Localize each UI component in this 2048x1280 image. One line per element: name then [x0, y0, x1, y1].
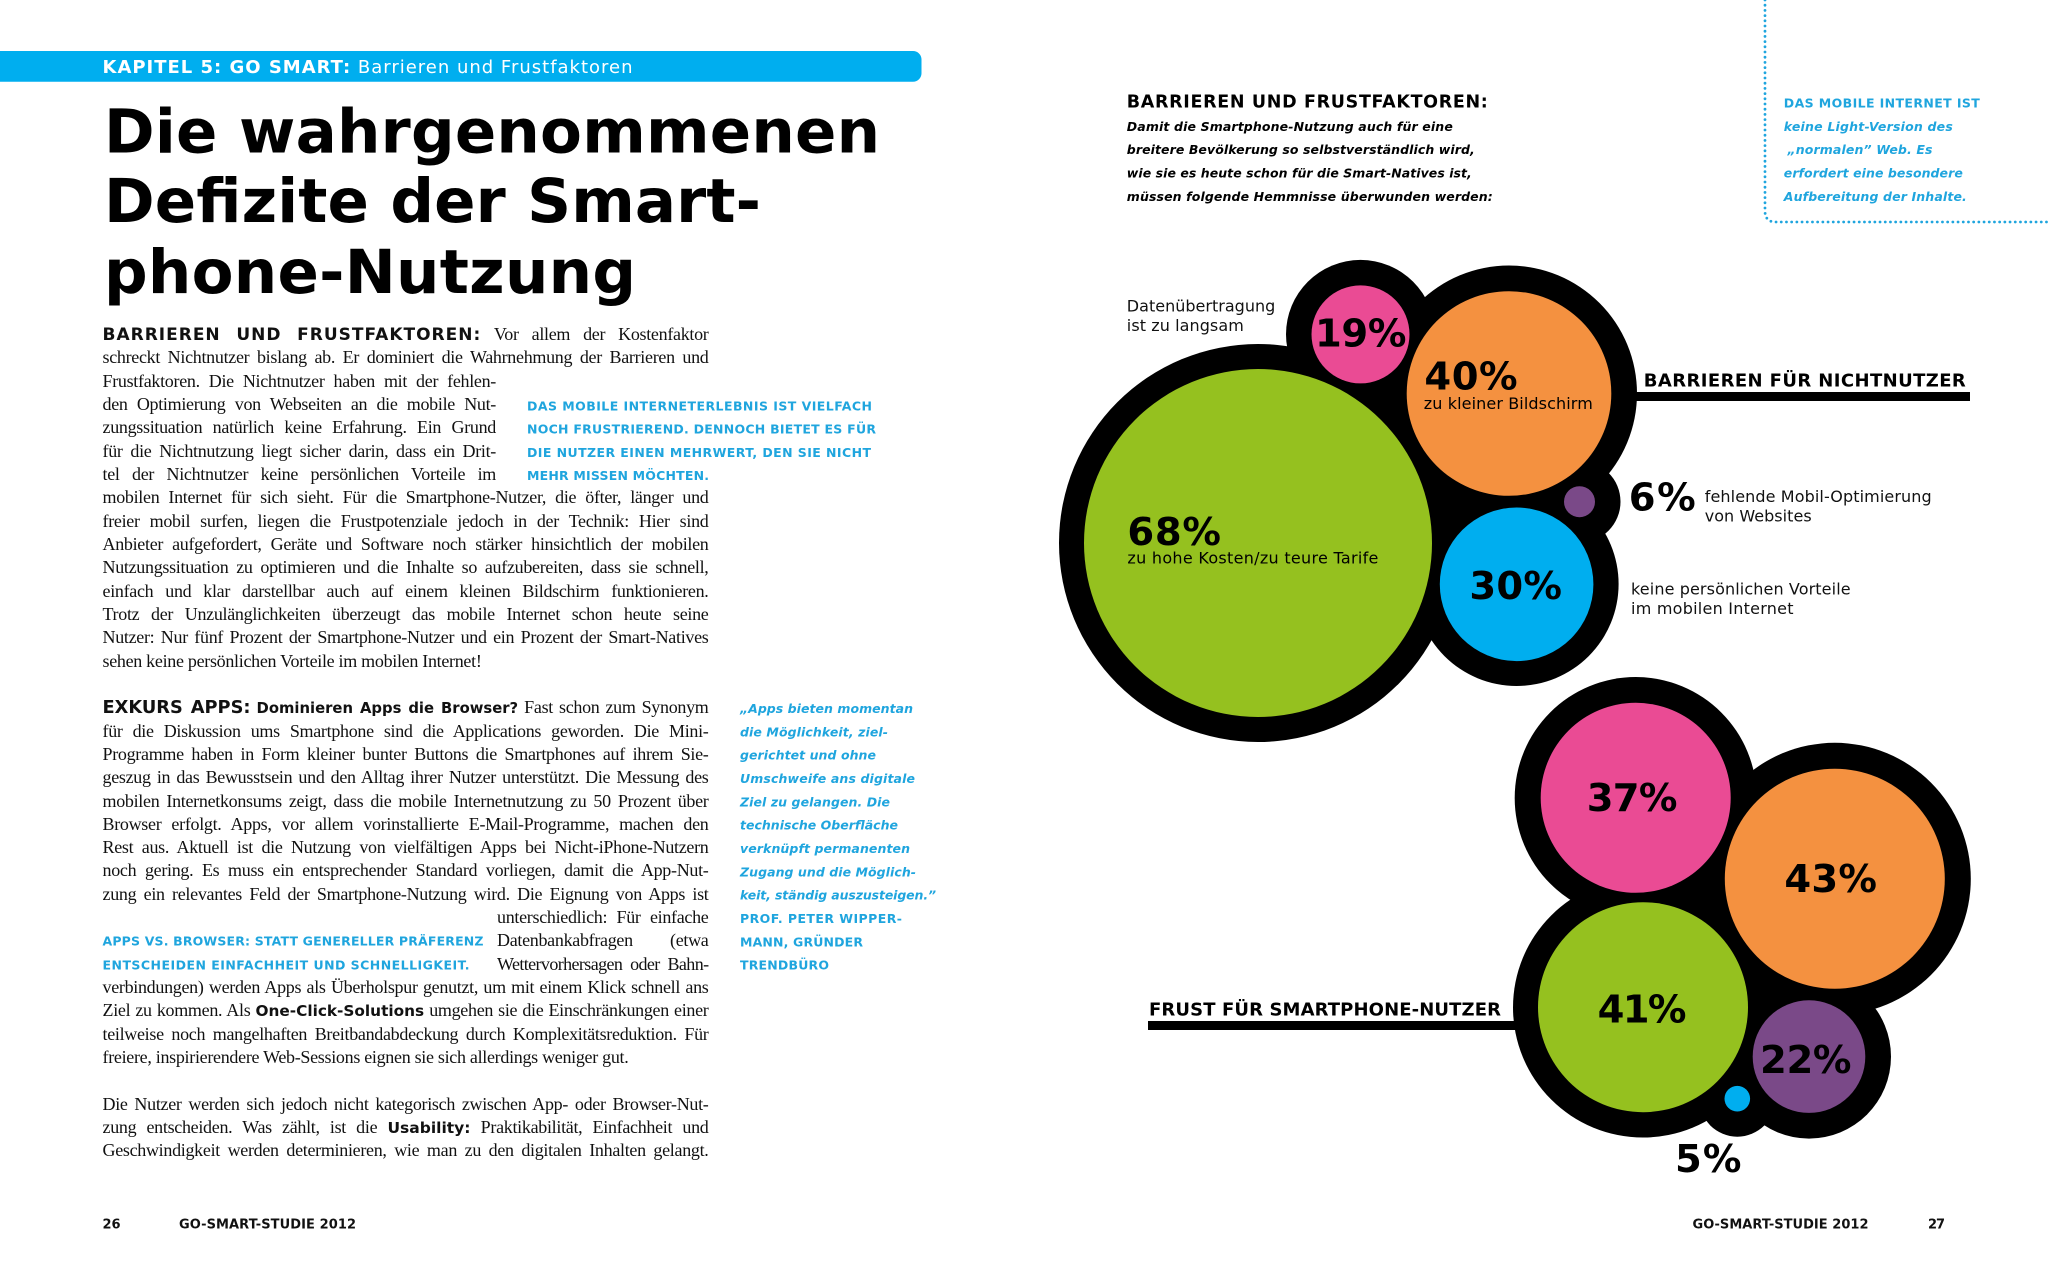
- chapter bar: [0, 51, 922, 82]
- side box: mobile Internet: Aufbereitung der Inhalte.: [1783, 189, 1967, 204]
- side quote: Prof. Peter Wippermann: [739, 701, 936, 973]
- pull quote: mobiles Interneterlebnis: [527, 398, 876, 483]
- chapter bar: KAPITEL 5: GO SMART: Barrieren und Frustfaktoren: [102, 57, 632, 78]
- body text: Barrieren und Frustfaktoren: Trotz der Unzulänglichkeiten überzeugt das mobile Internet schon heute seine: [102, 604, 708, 624]
- label: keine persönlichen Vorteile: im mobilen Internet: [1631, 599, 1794, 618]
- bubble: 19% Datenübertragung: 19%: [1315, 311, 1406, 356]
- pull quote: Apps vs. Browser: APPS VS. BROWSER: STATT GENERELLER PRÄFERENZ: [102, 934, 484, 949]
- body text: Exkurs Apps: zung ein relevantes Feld der Smartphone-Nutzung wird. Die Eignung von Apps ist: [102, 884, 708, 904]
- body text: Barrieren und Frustfaktoren: Anbieter aufgefordert, Geräte und Software noch stärker hinsichtlich der mobilen: [102, 534, 708, 554]
- body text: Exkurs Apps: teilweise noch mangelhaften Breitbandabdeckung durch Komplexitätsreduktion. Für: [102, 1024, 708, 1044]
- bubble: 5%: [1724, 1086, 1750, 1111]
- label: 5%: 5%: [1675, 1137, 1742, 1182]
- side box: mobile Internet: „normalen” Web. Es: [1786, 142, 1932, 157]
- body text: Barrieren und Frustfaktoren: für die Nichtnutzung liegt sicher darin, dass ein Drit-: [102, 441, 496, 461]
- label: Datenübertragung: Datenübertragung: [1127, 296, 1275, 316]
- body text: Exkurs Apps: zung entscheiden. Was zählt, ist die Usability: Praktikabilität, Einfachheit und: [102, 1117, 708, 1137]
- body text: Barrieren und Frustfaktoren: mobilen Internet für sich sieht. Für die Smartphone-Nutzer, die öfter, länger und: [102, 487, 708, 507]
- title: [104, 97, 880, 308]
- label: Datenübertragung: ist zu langsam: [1127, 316, 1244, 335]
- title: Defizite der Smart-: [104, 166, 761, 237]
- footer right: GO-SMART-STUDIE 2012: [1692, 1218, 1868, 1233]
- body text: Barrieren und Frustfaktoren: BARRIEREN UND FRUSTFAKTOREN: Vor allem der Kostenfaktor: [102, 324, 708, 345]
- bubble: 37%: [1541, 703, 1731, 893]
- pull quote: mobiles Interneterlebnis: DIE NUTZER EINEN MEHRWERT, DEN SIE NICHT: [527, 445, 871, 460]
- side box: mobile Internet: keine Light-Version des: [1784, 119, 1953, 134]
- footer right: [1692, 1218, 1945, 1233]
- bubble: 68% zu hohe Kosten: 68%: [1127, 510, 1221, 555]
- side box: mobile Internet: erfordert eine besondere: [1784, 166, 1963, 181]
- side quote: Prof. Peter Wippermann: die Möglichkeit, ziel-: [740, 724, 888, 739]
- body text: Barrieren und Frustfaktoren: [102, 324, 709, 671]
- side quote: Prof. Peter Wippermann: PROF. PETER WIPPER-: [740, 911, 902, 926]
- body text: Barrieren und Frustfaktoren: Nutzer: Nur fünf Prozent der Smartphone-Nutzer und ein Prozent der Smart-Natives: [102, 627, 708, 647]
- body text: Barrieren und Frustfaktoren: einfach und klar darstellbar auch auf einem kleinen Bildschirm funktionieren.: [102, 581, 708, 601]
- bubble: 37%: 37%: [1587, 776, 1677, 821]
- right page intro: müssen folgende Hemmnisse überwunden werden:: [1127, 189, 1493, 204]
- bubble: 40% zu kleiner Bildschirm: 40%: [1424, 355, 1518, 400]
- pull quote: mobiles Interneterlebnis: DAS MOBILE INTERNETERLEBNIS IST VIELFACH: [527, 398, 872, 414]
- title: phone-Nutzung: [104, 237, 636, 308]
- body text: Exkurs Apps: unterschiedlich: Für einfache: [497, 907, 708, 927]
- body text: Barrieren und Frustfaktoren: Nutzungssituation zu optimieren und die Inhalte so aufzubereiten, dass sie schnell,: [102, 557, 708, 577]
- bubble chart: Frust für Smartphone-Nutzer: [1148, 677, 1971, 1182]
- body text: Barrieren und Frustfaktoren: den Optimierung von Webseiten an die mobile Nut-: [102, 394, 496, 414]
- label: 6% fehlende Mobil-Optimierung: 6%: [1629, 476, 1696, 521]
- footer left: 26: [102, 1218, 120, 1233]
- side quote: Prof. Peter Wippermann: technische Oberfläche: [740, 818, 898, 833]
- bubble: 43%: 43%: [1784, 857, 1877, 902]
- body text: Exkurs Apps: Die Nutzer werden sich jedoch nicht kategorisch zwischen App- oder Browser-Nut-: [102, 1094, 708, 1114]
- body text: Exkurs Apps: EXKURS APPS: Dominieren Apps die Browser? Fast schon zum Synonym: [102, 697, 709, 718]
- label: keine persönlichen Vorteile: keine persönlichen Vorteile: [1631, 580, 1851, 598]
- footer left: GO-SMART-STUDIE 2012: [179, 1218, 356, 1233]
- label: 6% fehlende Mobil-Optimierung: fehlende Mobil-Optimierung: [1705, 487, 1932, 506]
- pull quote: mobiles Interneterlebnis: NOCH FRUSTRIEREND. DENNOCH BIETET ES FÜR: [527, 422, 876, 437]
- body text: Exkurs Apps: [102, 697, 709, 1160]
- bubble: 40% zu kleiner Bildschirm: [1407, 291, 1611, 496]
- body text: Barrieren und Frustfaktoren: schreckt Nichtnutzer bislang ab. Er dominiert die Wahrnehmung der Barrieren und: [102, 347, 708, 367]
- side quote: Prof. Peter Wippermann: Umschweife ans digitale: [740, 771, 915, 786]
- footer right: 27: [1928, 1218, 1945, 1233]
- body text: Barrieren und Frustfaktoren: Frustfaktoren. Die Nichtnutzer haben mit der fehlen-: [102, 371, 496, 391]
- body text: Exkurs Apps: mobilen Internetkonsums zeigt, dass die mobile Internetnutzung zu 50 Prozent über: [102, 790, 708, 810]
- bubble: 30%: [1440, 508, 1593, 661]
- label: 6% fehlende Mobil-Optimierung: [1629, 476, 1932, 526]
- label: Datenübertragung: [1127, 296, 1275, 335]
- heading: Barrieren für Nichtnutzer: BARRIEREN FÜR NICHTNUTZER: [1644, 370, 1966, 392]
- side box: mobile Internet: DAS MOBILE INTERNET IST: [1784, 96, 1980, 111]
- body text: Barrieren und Frustfaktoren: sehen keine persönlichen Vorteile im mobilen Internet!: [102, 651, 482, 671]
- heading: Frust für Smartphone-Nutzer: FRUST FÜR SMARTPHONE-NUTZER: [1149, 998, 1501, 1020]
- body text: Exkurs Apps: Wettervorhersagen oder Bahn-: [497, 954, 708, 974]
- body text: Exkurs Apps: verbindungen) werden Apps als Überholspur genutzt, um mit einem Klick schnell ans: [102, 977, 708, 997]
- right page intro: BARRIEREN UND FRUSTFAKTOREN:: [1127, 92, 1488, 112]
- body text: Barrieren und Frustfaktoren: zungssituation natürlich keine Erfahrung. Ein Grund: [102, 417, 496, 437]
- label: 6% fehlende Mobil-Optimierung: von Websites: [1705, 506, 1812, 526]
- body text: Exkurs Apps: Geschwindigkeit werden determinieren, wie man zu den digitalen Inhalten gelangt.: [102, 1140, 708, 1160]
- body text: Exkurs Apps: geszug in das Bewusstsein und den Alltag ihrer Nutzer unterstützt. Die Messung des: [102, 767, 708, 787]
- bubble: 22%: [1753, 1000, 1865, 1113]
- body text: Barrieren und Frustfaktoren: freier mobil surfen, liegen die Frustpotenziale jedoch in der Technik: Hier sind: [102, 511, 708, 531]
- side quote: Prof. Peter Wippermann: MANN, GRÜNDER: [740, 934, 863, 949]
- right page intro: Damit die Smartphone-Nutzung auch für eine: [1127, 119, 1453, 134]
- body text: Exkurs Apps: Browser erfolgt. Apps, vor allem vorinstallierte E-Mail-Programme, machen den: [102, 814, 708, 834]
- bubble: 41%: 41%: [1598, 987, 1686, 1032]
- body text: Exkurs Apps: freiere, inspirierendere Web-Sessions eignen sie sich allerdings weniger gut.: [102, 1047, 628, 1067]
- bubble: 68% zu hohe Kosten: [1084, 369, 1432, 717]
- bubble: 6%: [1564, 486, 1595, 517]
- side quote: Prof. Peter Wippermann: Zugang und die Möglich-: [739, 864, 916, 879]
- side quote: Prof. Peter Wippermann: TRENDBÜRO: [740, 958, 829, 973]
- body text: Exkurs Apps: Ziel zu kommen. Als One-Click-Solutions umgehen sie die Einschränkungen einer: [102, 1000, 708, 1020]
- side quote: Prof. Peter Wippermann: gerichtet und ohne: [740, 748, 876, 763]
- body text: Exkurs Apps: Rest aus. Aktuell ist die Nutzung von vielfältigen Apps bei Nicht-iPhone-Nutzern: [102, 837, 708, 857]
- footer left: [102, 1218, 356, 1233]
- right page intro: [1127, 92, 1493, 204]
- body text: Exkurs Apps: noch gering. Es muss ein entsprechender Standard vorliegen, damit die App-Nut-: [102, 860, 708, 880]
- side box: mobile Internet: [1765, 0, 2048, 222]
- right page intro: breitere Bevölkerung so selbstverständlich wird,: [1127, 142, 1475, 157]
- bubble: 40% zu kleiner Bildschirm: zu kleiner Bildschirm: [1424, 394, 1593, 413]
- title: Die wahrgenommenen: [104, 97, 880, 168]
- bubble: 30%: 30%: [1469, 564, 1562, 609]
- bubble: 43%: [1725, 769, 1945, 989]
- bubble: 22%: 22%: [1760, 1038, 1852, 1083]
- side quote: Prof. Peter Wippermann: keit, ständig auszusteigen.”: [740, 888, 936, 903]
- bubble: 41%: [1538, 902, 1748, 1112]
- body text: Exkurs Apps: für die Diskussion ums Smartphone sind die Applications geworden. Die Mini-: [102, 721, 708, 741]
- bubble: 68% zu hohe Kosten: zu hohe Kosten/zu teure Tarife: [1127, 548, 1378, 568]
- body text: Exkurs Apps: Programme haben in Form kleiner bunter Buttons die Smartphones auf ihrem Sie-: [102, 744, 708, 764]
- side quote: Prof. Peter Wippermann: verknüpft permanenten: [740, 841, 910, 856]
- label: keine persönlichen Vorteile: [1631, 580, 1851, 618]
- side quote: Prof. Peter Wippermann: Ziel zu gelangen. Die: [739, 794, 890, 809]
- pull quote: Apps vs. Browser: [102, 934, 484, 972]
- pull quote: Apps vs. Browser: ENTSCHEIDEN EINFACHHEIT UND SCHNELLIGKEIT.: [102, 957, 470, 972]
- body text: Barrieren und Frustfaktoren: tel der Nichtnutzer keine persönlichen Vorteile im: [102, 464, 496, 484]
- right page intro: wie sie es heute schon für die Smart-Natives ist,: [1127, 166, 1472, 181]
- pull quote: mobiles Interneterlebnis: MEHR MISSEN MÖCHTEN.: [527, 468, 709, 483]
- body text: Exkurs Apps: Datenbankabfragen (etwa: [497, 930, 708, 950]
- side quote: Prof. Peter Wippermann: „Apps bieten momentan: [739, 701, 913, 716]
- bubble chart: Barrieren für Nichtnutzer: [1059, 260, 1970, 742]
- bubble: 19% Datenübertragung: [1312, 285, 1410, 383]
